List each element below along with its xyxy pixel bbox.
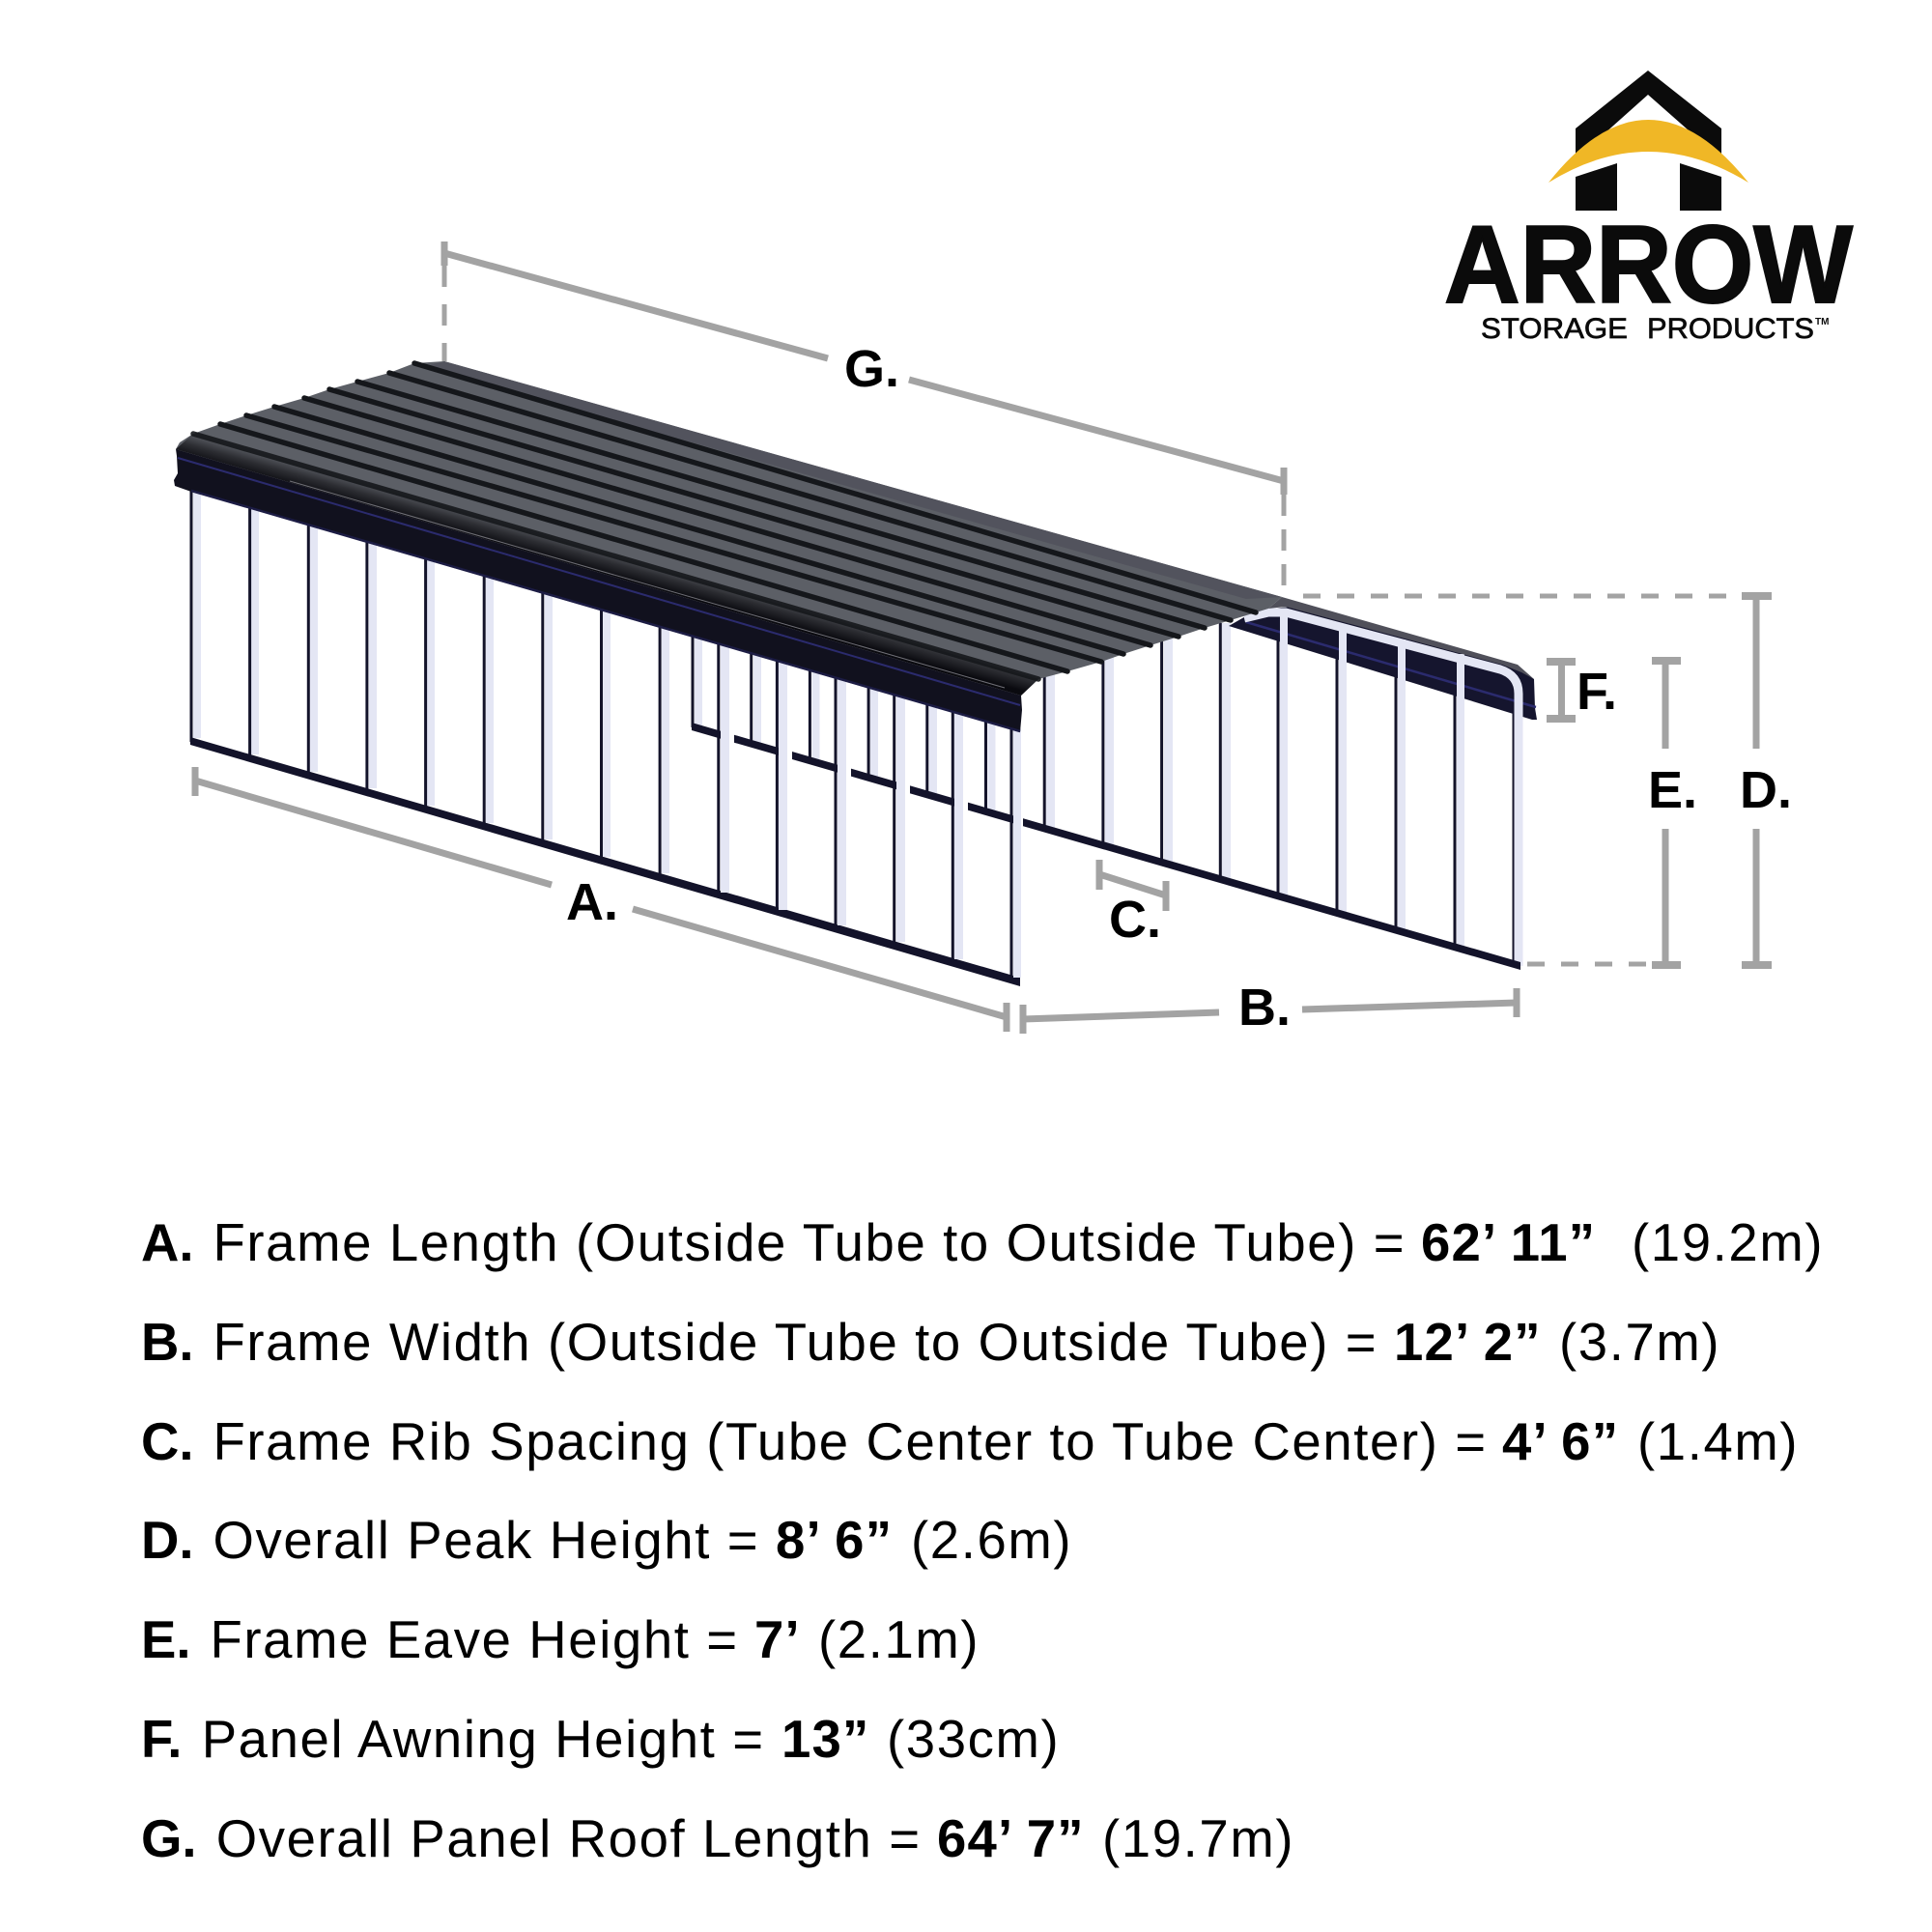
legend line E: 7’ bbox=[754, 1610, 801, 1669]
legend line F: F. bbox=[141, 1710, 182, 1769]
legend line D: D. bbox=[141, 1511, 193, 1570]
legend line C: Frame Rib Spacing (Tube Center to Tube Center) = bbox=[213, 1412, 1488, 1471]
far wall frame bbox=[693, 618, 1514, 967]
label G: G. bbox=[844, 340, 899, 398]
legend line B: Frame Width (Outside Tube to Outside Tube) = bbox=[213, 1313, 1378, 1372]
legend line F: Panel Awning Height = bbox=[202, 1710, 765, 1769]
eave shading bbox=[176, 434, 1038, 696]
fascia lower lip bbox=[191, 491, 1020, 731]
fascia highlight bbox=[290, 481, 1005, 688]
dimension legend bbox=[141, 1213, 1824, 1868]
label B: B. bbox=[1238, 979, 1291, 1037]
dimension C bbox=[1099, 860, 1166, 949]
near wall frame bbox=[190, 491, 1023, 986]
legend line A: (19.2m) bbox=[1632, 1213, 1824, 1272]
logo trademark: TM bbox=[1815, 317, 1829, 327]
label D: D. bbox=[1740, 761, 1792, 819]
far roof edge strip bbox=[1268, 597, 1534, 679]
logo subtitle storage: STORAGE bbox=[1481, 313, 1628, 345]
logo house roof bbox=[1576, 71, 1721, 159]
legend line G: 64’ 7” bbox=[937, 1809, 1085, 1868]
legend line G: Overall Panel Roof Length = bbox=[216, 1809, 922, 1868]
dimension G bbox=[444, 242, 1284, 599]
near wall base rail bbox=[190, 737, 1020, 986]
legend line E: Frame Eave Height = bbox=[211, 1610, 739, 1669]
rafter and far end post bbox=[1244, 612, 1519, 966]
legend line C: C. bbox=[141, 1412, 193, 1471]
legend line E: E. bbox=[141, 1610, 191, 1669]
legend line F: 13” bbox=[781, 1710, 869, 1769]
dimension F bbox=[1547, 662, 1617, 721]
far post light strips over awning bbox=[1280, 611, 1464, 950]
legend line G: G. bbox=[141, 1809, 197, 1868]
fascia blue stripe bbox=[178, 458, 1020, 705]
logo wordmark: ARROW bbox=[1444, 204, 1853, 327]
label F: F. bbox=[1577, 663, 1617, 721]
dimension A bbox=[195, 767, 1007, 1032]
far side fascia awning bbox=[1229, 607, 1537, 720]
awning blue stripe bbox=[1246, 622, 1536, 707]
carport illustration bbox=[174, 361, 1537, 986]
roof panels bbox=[174, 361, 1534, 732]
legend line G: (19.7m) bbox=[1102, 1809, 1294, 1868]
logo subtitle products: PRODUCTS bbox=[1647, 313, 1814, 345]
logo gold arc bbox=[1548, 120, 1748, 183]
logo house right wall bbox=[1680, 163, 1721, 211]
legend line B: (3.7m) bbox=[1559, 1313, 1720, 1372]
roof top lighter strip bbox=[430, 361, 1282, 599]
legend line B: 12’ 2” bbox=[1394, 1313, 1542, 1372]
near fascia bbox=[174, 449, 1022, 732]
legend line C: (1.4m) bbox=[1637, 1412, 1799, 1471]
label E: E. bbox=[1648, 761, 1697, 819]
legend line D: 8’ 6” bbox=[776, 1511, 893, 1570]
legend line A: 62’ 11” bbox=[1421, 1213, 1596, 1272]
logo: Arrow Storage Products bbox=[1444, 71, 1853, 345]
legend line B: B. bbox=[141, 1313, 193, 1372]
logo house left wall bbox=[1576, 163, 1617, 211]
legend line E: (2.1m) bbox=[818, 1610, 980, 1669]
label A: A. bbox=[566, 873, 618, 931]
roof surface bbox=[176, 361, 1282, 696]
legend line A: A. bbox=[141, 1213, 193, 1272]
far wall base rail bbox=[692, 723, 1520, 970]
legend line F: (33cm) bbox=[887, 1710, 1060, 1769]
corrugation grooves bbox=[193, 363, 1256, 679]
label C: C. bbox=[1109, 891, 1161, 949]
legend line C: 4’ 6” bbox=[1502, 1412, 1619, 1471]
legend line D: (2.6m) bbox=[911, 1511, 1072, 1570]
legend line D: Overall Peak Height = bbox=[213, 1511, 759, 1570]
legend line A: Frame Length (Outside Tube to Outside Tube) = bbox=[213, 1213, 1406, 1272]
dimension B bbox=[1023, 979, 1517, 1037]
